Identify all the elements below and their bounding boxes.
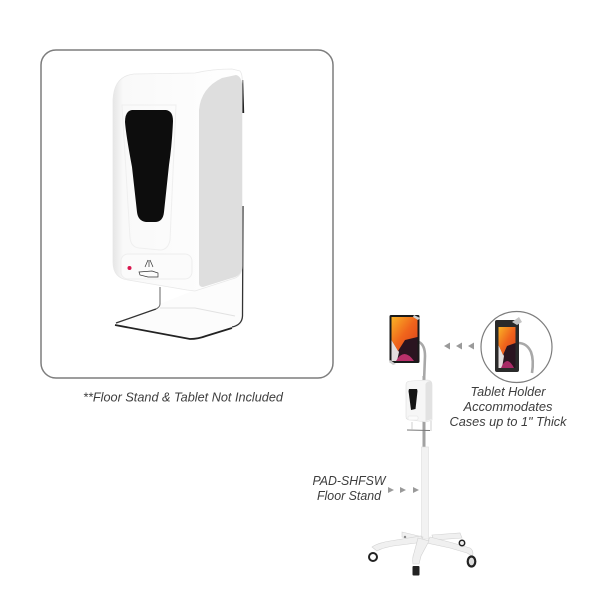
dispenser front body and rim bbox=[113, 69, 242, 291]
detail gooseneck bbox=[518, 343, 533, 373]
label: floor stand bbox=[312, 474, 387, 503]
gooseneck arm bbox=[419, 342, 425, 382]
panel: tablet holder detail circle bbox=[481, 312, 552, 382]
illustration: soap dispenser on acrylic stand bbox=[113, 69, 243, 339]
black window bbox=[125, 110, 173, 222]
arrows: toward floor stand bbox=[388, 487, 419, 493]
five-leg base bbox=[372, 532, 473, 564]
tablet bbox=[389, 315, 420, 365]
label: tablet holder: Cases up to 1" Thick bbox=[450, 415, 567, 429]
lower stand pole bbox=[422, 447, 428, 539]
illustration: full floor stand with tablet bbox=[369, 315, 475, 576]
label: floor stand: PAD-SHFSW bbox=[312, 474, 387, 488]
arrows: toward tablet bbox=[444, 342, 474, 350]
gray rod bbox=[422, 376, 426, 448]
label: tablet holder bbox=[450, 385, 567, 429]
sensor plate bbox=[121, 254, 192, 279]
label: tablet holder: Tablet Holder bbox=[470, 385, 546, 399]
label: tablet holder: Accommodates bbox=[462, 400, 552, 414]
panel: product photo frame bbox=[41, 50, 333, 378]
acrylic stand bbox=[115, 80, 243, 339]
detail tablet bbox=[495, 320, 519, 372]
caption: floor stand note: **Floor Stand & Tablet Not Included bbox=[83, 390, 284, 404]
recessed window panel outline bbox=[122, 105, 176, 250]
casters bbox=[369, 536, 475, 576]
red indicator light bbox=[128, 266, 132, 270]
hand icon bbox=[139, 260, 158, 277]
label: floor stand: Floor Stand bbox=[317, 489, 382, 503]
dispenser side panel bbox=[199, 75, 242, 287]
mini dispenser bbox=[406, 380, 432, 431]
